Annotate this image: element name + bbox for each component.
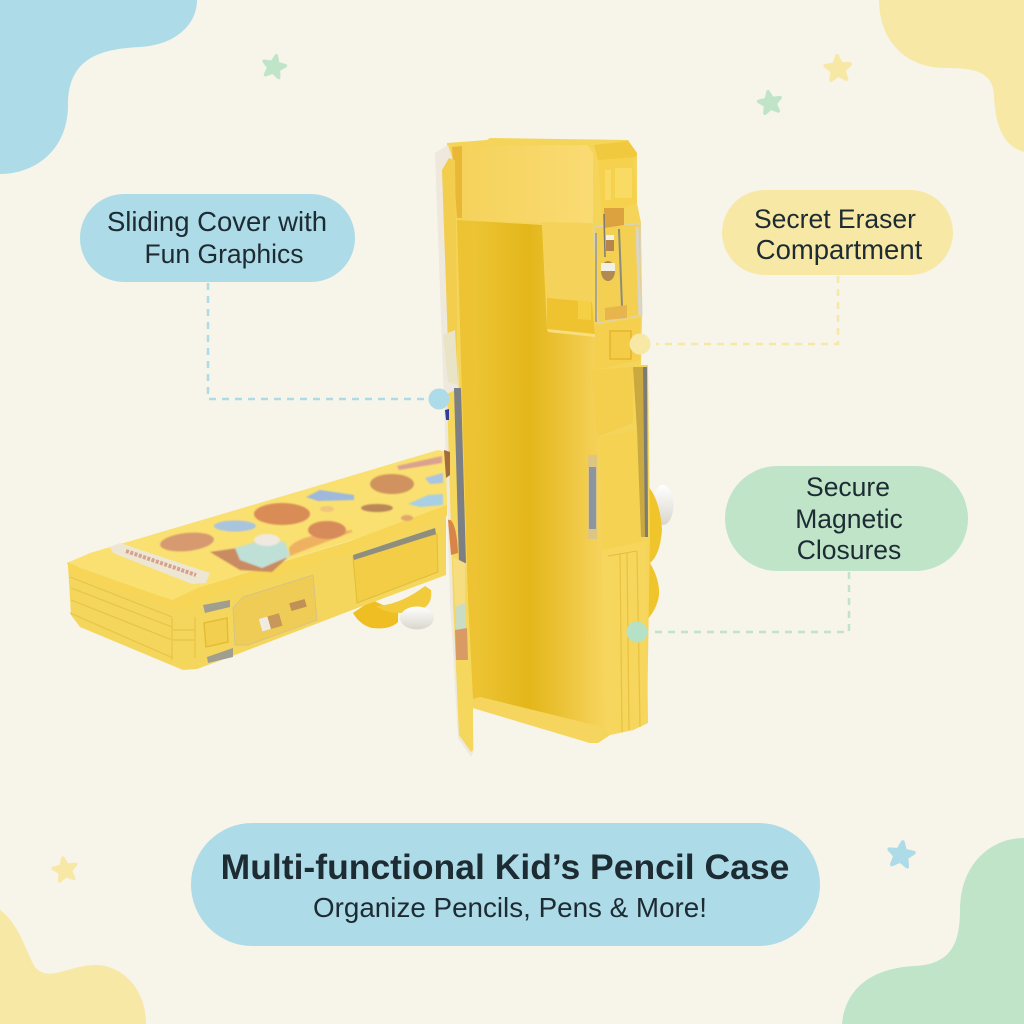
label: Magnetic [795, 504, 903, 534]
label: Fun Graphics [144, 239, 304, 269]
marker [630, 334, 650, 354]
pill [722, 190, 953, 275]
inner floor [457, 220, 602, 727]
star: yellow bottom left [52, 856, 78, 882]
blob: top right yellow [879, 0, 1024, 152]
label: Compartment [756, 234, 923, 265]
blob: bottom left yellow [0, 910, 146, 1024]
inner partition block [542, 222, 592, 302]
connector [652, 572, 849, 632]
callout: magnetic closures [626, 466, 968, 642]
subtitle: Organize Pencils, Pens & More! [313, 892, 707, 923]
top face [67, 450, 447, 603]
marker [428, 388, 450, 410]
open cover [435, 145, 474, 757]
side block [592, 367, 633, 437]
label: Sliding Cover with [107, 206, 327, 237]
top ridges [594, 141, 637, 160]
left edge shade of lid top [452, 146, 462, 218]
rail windows [605, 168, 632, 200]
upper side rail [598, 155, 637, 215]
callout: eraser compartment [630, 190, 953, 354]
side ridges [70, 577, 195, 660]
connector [656, 276, 838, 344]
square button [595, 318, 640, 370]
side wall [68, 510, 446, 670]
star: yellow top right [825, 55, 851, 80]
pill [80, 194, 355, 282]
metal clip lower [207, 648, 233, 663]
metal clip front [203, 600, 230, 613]
sticker graphics [159, 456, 443, 572]
latch slot [588, 455, 597, 539]
title: Multi-functional Kid’s Pencil Case [221, 847, 789, 887]
banner pill [191, 823, 820, 946]
label: Closures [797, 535, 901, 565]
marker [626, 622, 648, 642]
metal clip upper-right [633, 367, 648, 537]
square button [204, 618, 228, 647]
top face rim [67, 505, 447, 609]
bottom rim [473, 697, 604, 743]
metal strip [353, 528, 436, 560]
connector [208, 283, 425, 399]
notch recess [547, 298, 595, 337]
pencil case: lying closed [67, 450, 447, 670]
label strip [110, 543, 210, 584]
clear compartment [594, 208, 642, 323]
outer body [447, 138, 650, 743]
blob: bottom right green [842, 838, 1024, 1024]
pencil case: upright open [435, 138, 674, 757]
side panel [353, 534, 438, 603]
star: green top right [757, 90, 782, 114]
star: blue bottom right [887, 840, 915, 867]
pill [725, 466, 968, 571]
knob behind upright case [645, 483, 674, 622]
lid inner panel [458, 145, 593, 223]
label: Secret Eraser [754, 204, 916, 234]
blob: top left blue [0, 0, 197, 174]
clear slider [233, 575, 317, 645]
star: green top left [261, 53, 287, 78]
knob under lying case [353, 586, 434, 630]
side mid wall [600, 430, 642, 555]
title banner [191, 823, 820, 946]
side lower wall ribbed [602, 541, 648, 735]
label: Secure [806, 472, 890, 502]
callout: sliding cover [80, 194, 450, 410]
inner left wall [457, 220, 481, 700]
